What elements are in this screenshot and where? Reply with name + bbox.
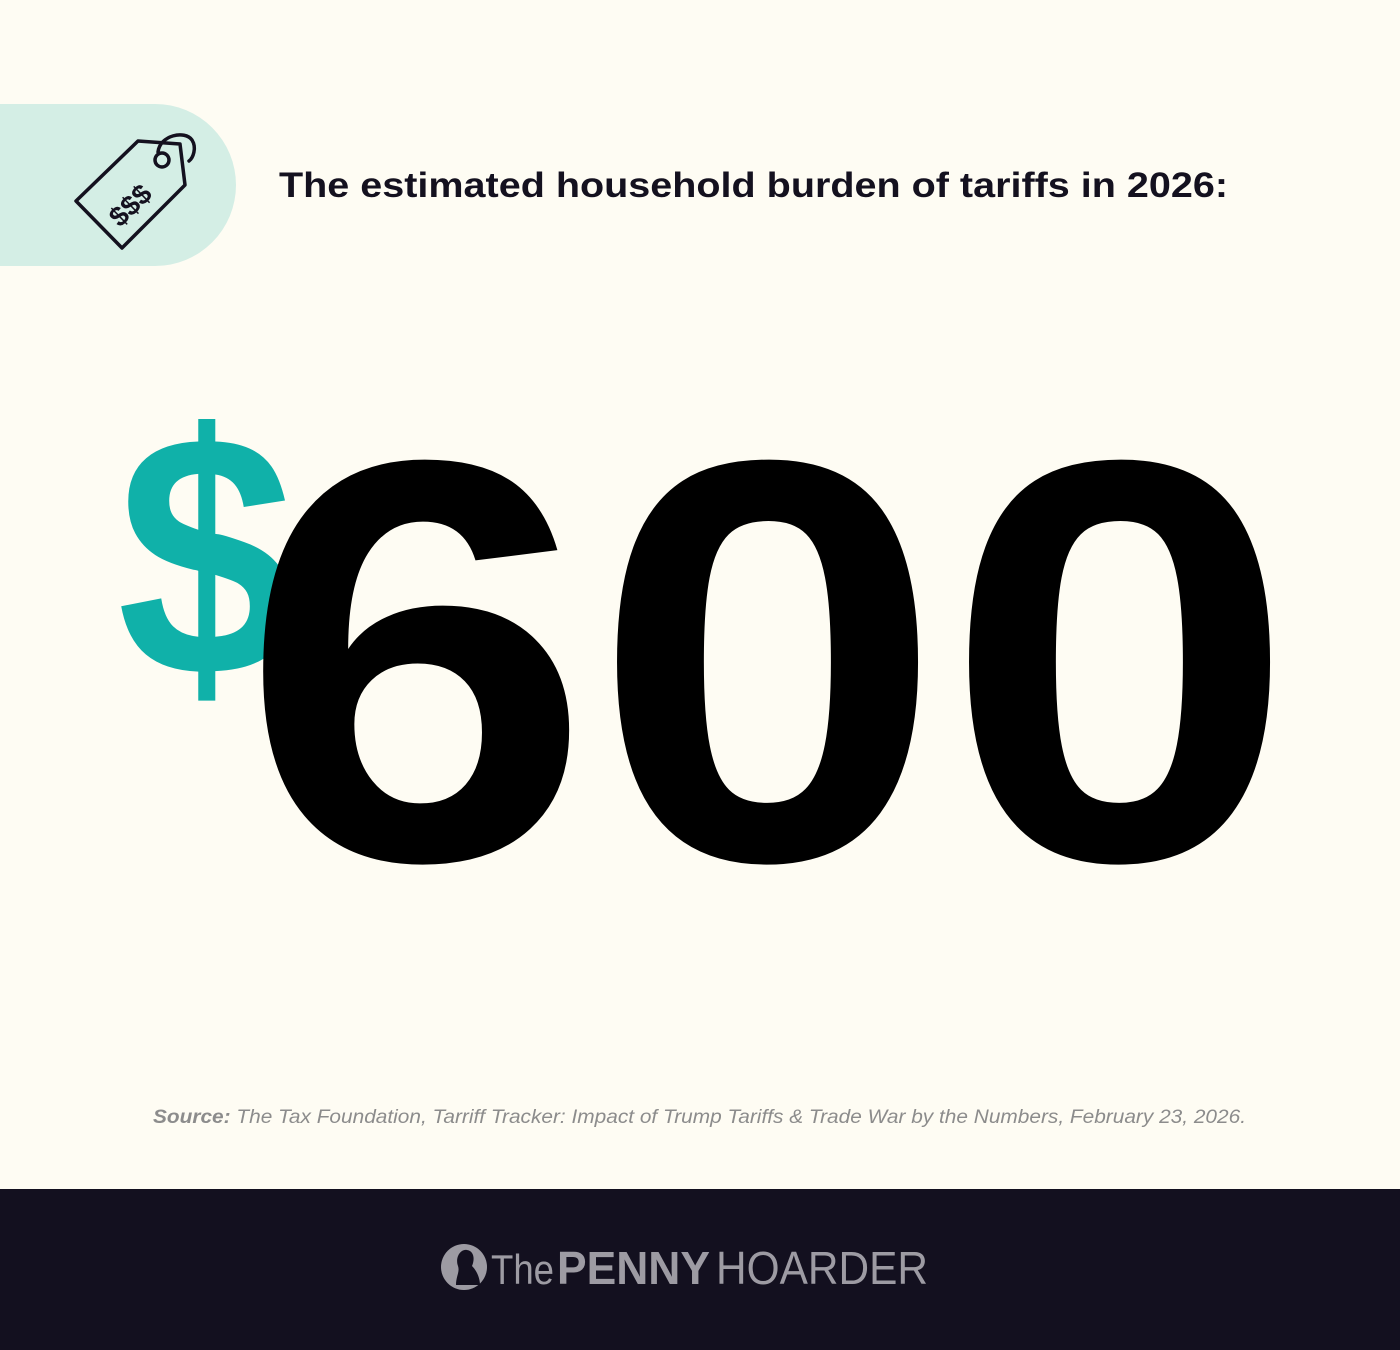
logo: HOARDER [716, 1242, 928, 1294]
icon: price tag: $$$ [103, 178, 158, 233]
icon: price tag [76, 135, 194, 248]
logo [441, 1242, 928, 1294]
source: Source: The Tax Foundation, Tarriff Tracker: Impact of Trump Tariffs & Trade War by the Numbers, February 23, 2026. [153, 1107, 1246, 1128]
title: The estimated household burden of tariffs in 2026: [279, 166, 1228, 205]
dollar sign: $ [117, 364, 295, 749]
logo: PENNY [557, 1242, 710, 1294]
header tab [0, 104, 236, 266]
big number 600: 600 [240, 342, 1296, 981]
logo: The [491, 1246, 554, 1293]
footer [0, 1189, 1400, 1350]
